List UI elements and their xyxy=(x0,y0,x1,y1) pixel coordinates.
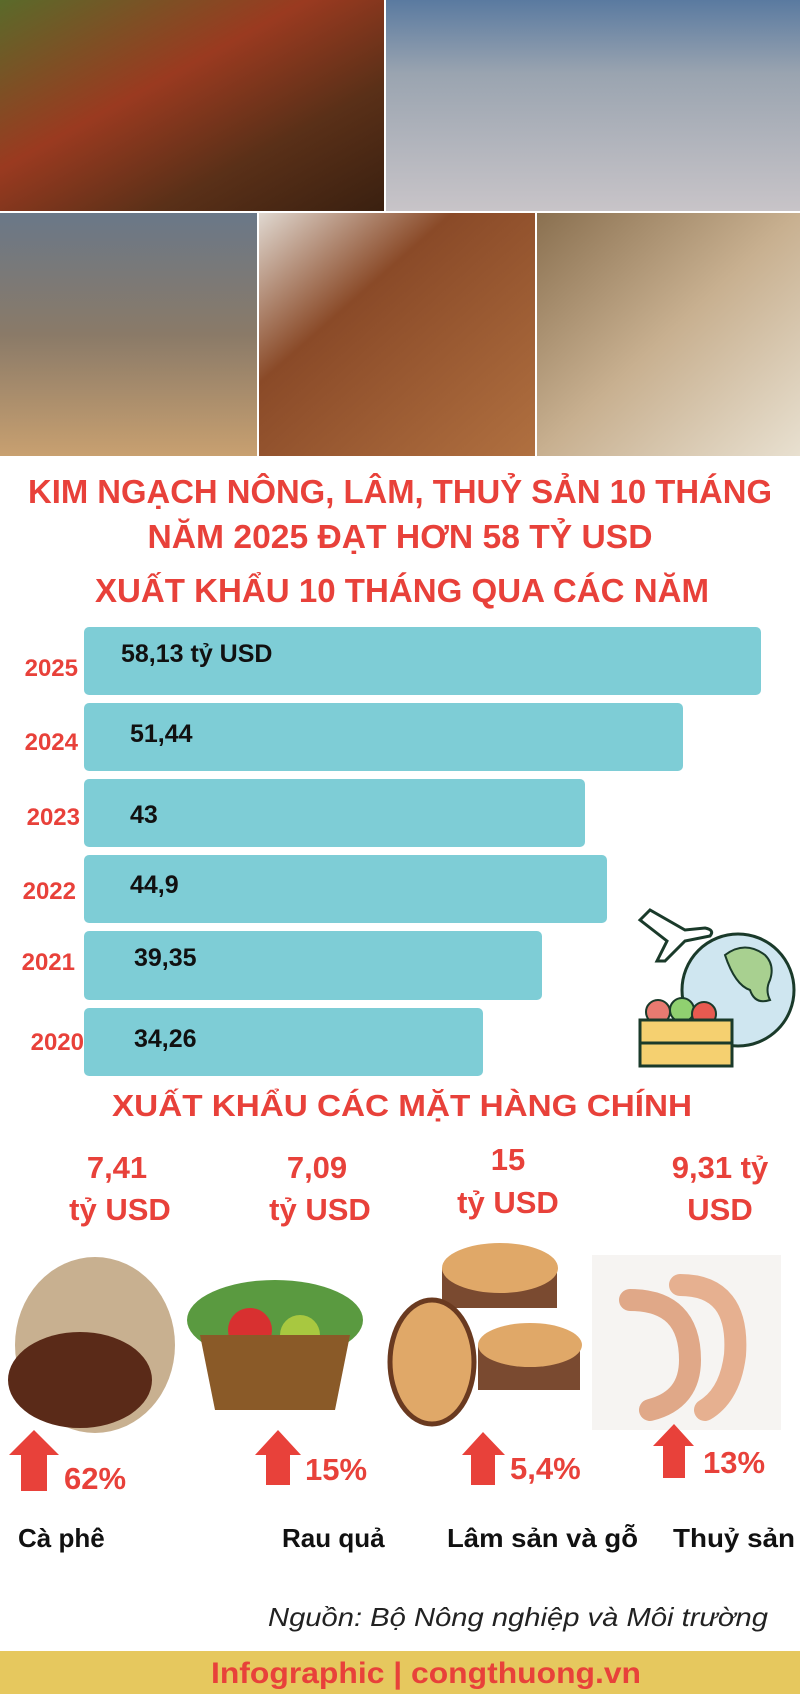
source note: Nguồn: Bộ Nông nghiệp và Môi trường xyxy=(268,1602,769,1632)
bar chart: 51,44 xyxy=(130,720,193,748)
label: Lâm sản và gỗ xyxy=(447,1523,638,1553)
bar chart: 2022 xyxy=(23,878,76,905)
icon: export globe with plane and crate xyxy=(640,910,794,1066)
arrow up xyxy=(255,1430,301,1485)
footer band xyxy=(0,1651,800,1694)
product values: 7,09 xyxy=(287,1150,347,1185)
arrow up xyxy=(9,1430,59,1491)
image: coffee sack xyxy=(8,1257,175,1433)
bar chart xyxy=(22,627,761,1076)
product values: tỷ USD xyxy=(457,1185,559,1220)
image: wood logs xyxy=(390,1243,582,1424)
product values: tỷ USD xyxy=(69,1192,171,1227)
product: fruit & vegetables xyxy=(187,1280,385,1553)
product: forestry & wood xyxy=(390,1243,638,1553)
title xyxy=(28,472,772,555)
product values: tỷ USD xyxy=(269,1192,371,1227)
label: Cà phê xyxy=(18,1523,105,1553)
product: seafood xyxy=(592,1255,795,1553)
label: Rau quả xyxy=(282,1523,385,1553)
bar chart: 2020 xyxy=(31,1029,84,1056)
bar chart: 43 xyxy=(130,801,158,829)
title: NĂM 2025 ĐẠT HƠN 58 TỶ USD xyxy=(148,518,652,555)
photo: cashew xyxy=(259,213,535,456)
arrow up xyxy=(653,1424,694,1478)
image: shrimp xyxy=(592,1255,781,1430)
product values: 7,41 xyxy=(87,1150,147,1185)
product values xyxy=(69,1142,769,1227)
percent: 5,4% xyxy=(510,1451,581,1486)
product values: USD xyxy=(687,1192,753,1227)
footer band: Infographic | congthuong.vn xyxy=(211,1657,641,1690)
bar chart: 44,9 xyxy=(130,871,179,899)
label: Thuỷ sản xyxy=(673,1523,795,1553)
product values: 9,31 tỷ xyxy=(672,1150,769,1185)
product: coffee xyxy=(8,1257,175,1553)
product values: 15 xyxy=(491,1142,525,1177)
percent: 62% xyxy=(64,1461,126,1496)
bar chart: 39,35 xyxy=(134,944,197,972)
title: KIM NGẠCH NÔNG, LÂM, THUỶ SẢN 10 THÁNG xyxy=(28,472,772,510)
bar chart: 2024 xyxy=(25,729,79,756)
bar chart: 58,13 tỷ USD xyxy=(121,640,272,668)
bar chart: 2025 xyxy=(25,655,78,682)
image: fruit basket xyxy=(187,1280,363,1410)
subtitle: chart heading: XUẤT KHẨU 10 THÁNG QUA CÁC NĂM xyxy=(95,572,709,609)
arrow up xyxy=(462,1432,505,1485)
bar chart: 2021 xyxy=(22,949,75,976)
bar chart: 2023 xyxy=(27,804,80,831)
photo: rice xyxy=(537,213,800,456)
photo: fish processing xyxy=(386,0,800,211)
photo: wood factory xyxy=(0,213,257,456)
percent: 13% xyxy=(703,1445,765,1480)
section heading: main products: XUẤT KHẨU CÁC MẶT HÀNG CHÍNH xyxy=(112,1088,692,1123)
bar chart: 34,26 xyxy=(134,1025,197,1053)
percent: 15% xyxy=(305,1452,367,1487)
photo: coffee xyxy=(0,0,384,211)
photo collage xyxy=(0,0,800,456)
